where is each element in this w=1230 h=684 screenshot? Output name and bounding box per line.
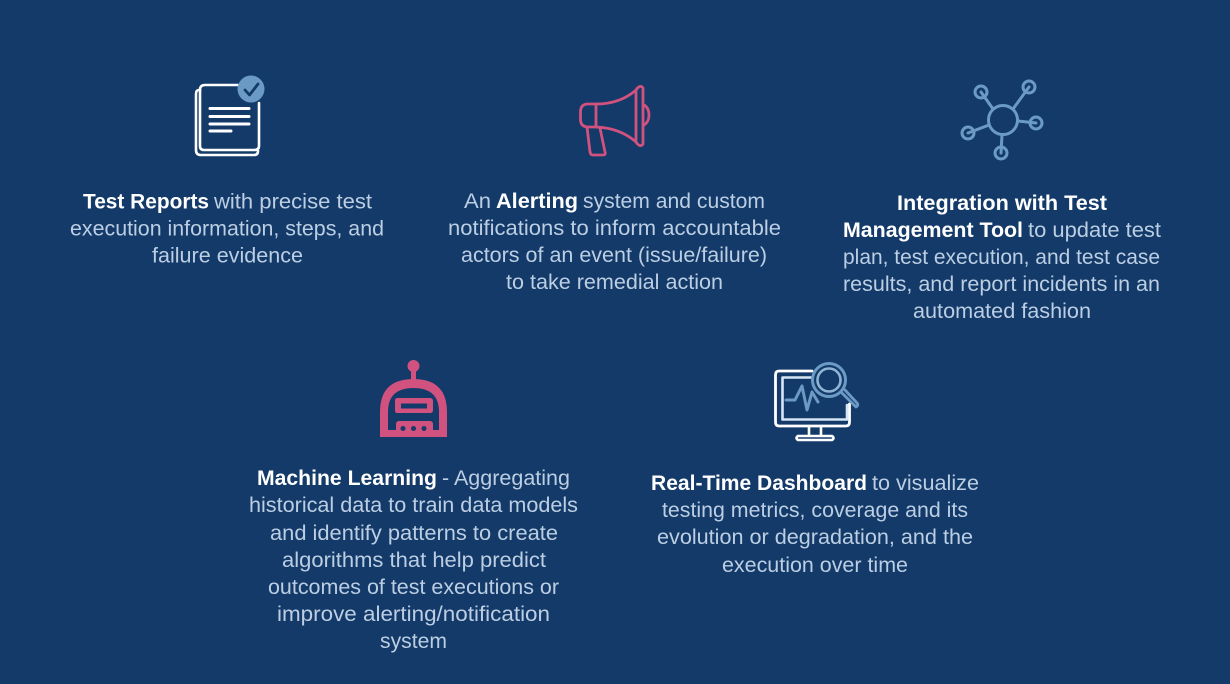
text: machine learning description: - Aggregating xyxy=(442,466,570,490)
text: machine learning description: outcomes of test executions or xyxy=(268,575,559,599)
text: test reports description: failure evidence xyxy=(152,244,303,268)
text: integration description: Management Tool xyxy=(843,218,1023,242)
icon: network hub xyxy=(962,81,1042,159)
text: dashboard description xyxy=(651,471,979,577)
panel: alerting xyxy=(448,86,781,294)
text: alerting description: Alerting xyxy=(496,189,578,213)
text: test reports description: Test Reports xyxy=(83,190,209,214)
icon: robot head xyxy=(380,360,447,437)
text: integration description: plan, test execution, and test case xyxy=(843,245,1160,269)
text: dashboard description: evolution or degradation, and the xyxy=(657,525,973,549)
text: alerting description: notifications to inform accountable xyxy=(448,216,781,240)
text: machine learning description: Machine Learning xyxy=(257,466,437,490)
icon: test report document with check badge xyxy=(196,76,264,155)
text: machine learning description: and identify patterns to create xyxy=(270,521,558,545)
text: dashboard description: testing metrics, coverage and its xyxy=(662,498,968,522)
icon: monitor with magnifier xyxy=(776,364,858,440)
text: dashboard description: to visualize xyxy=(872,471,979,495)
text: alerting description xyxy=(448,189,781,294)
text: machine learning description xyxy=(249,466,578,653)
text: alerting description: system and custom xyxy=(583,189,765,213)
text: test reports description xyxy=(70,190,384,268)
text: dashboard description: Real-Time Dashboard xyxy=(651,471,867,495)
text: integration description: results, and report incidents in an xyxy=(843,272,1160,296)
panel: test reports xyxy=(70,76,384,268)
text: machine learning description: algorithms that help predict xyxy=(282,548,546,572)
text: dashboard description: execution over time xyxy=(722,553,908,577)
text: test reports description: with precise test xyxy=(213,190,372,214)
text: alerting description: An xyxy=(464,189,491,213)
text: alerting description: to take remedial action xyxy=(506,270,723,294)
text: integration description: automated fashion xyxy=(913,299,1091,323)
text: alerting description: actors of an event (issue/failure) xyxy=(461,243,767,267)
panel: real-time dashboard xyxy=(651,364,979,577)
panel: test management integration xyxy=(843,81,1161,323)
text: integration description xyxy=(843,191,1161,323)
text: machine learning description: improve alerting/notification xyxy=(277,602,550,626)
text: integration description: to update test xyxy=(1028,218,1161,242)
panel: machine learning xyxy=(249,360,578,653)
text: integration description: Integration with Test xyxy=(897,191,1107,215)
text: machine learning description: system xyxy=(380,629,447,653)
text: test reports description: execution information, steps, and xyxy=(70,216,384,240)
icon: megaphone xyxy=(580,86,649,155)
text: machine learning description: historical data to train data models xyxy=(249,493,578,517)
